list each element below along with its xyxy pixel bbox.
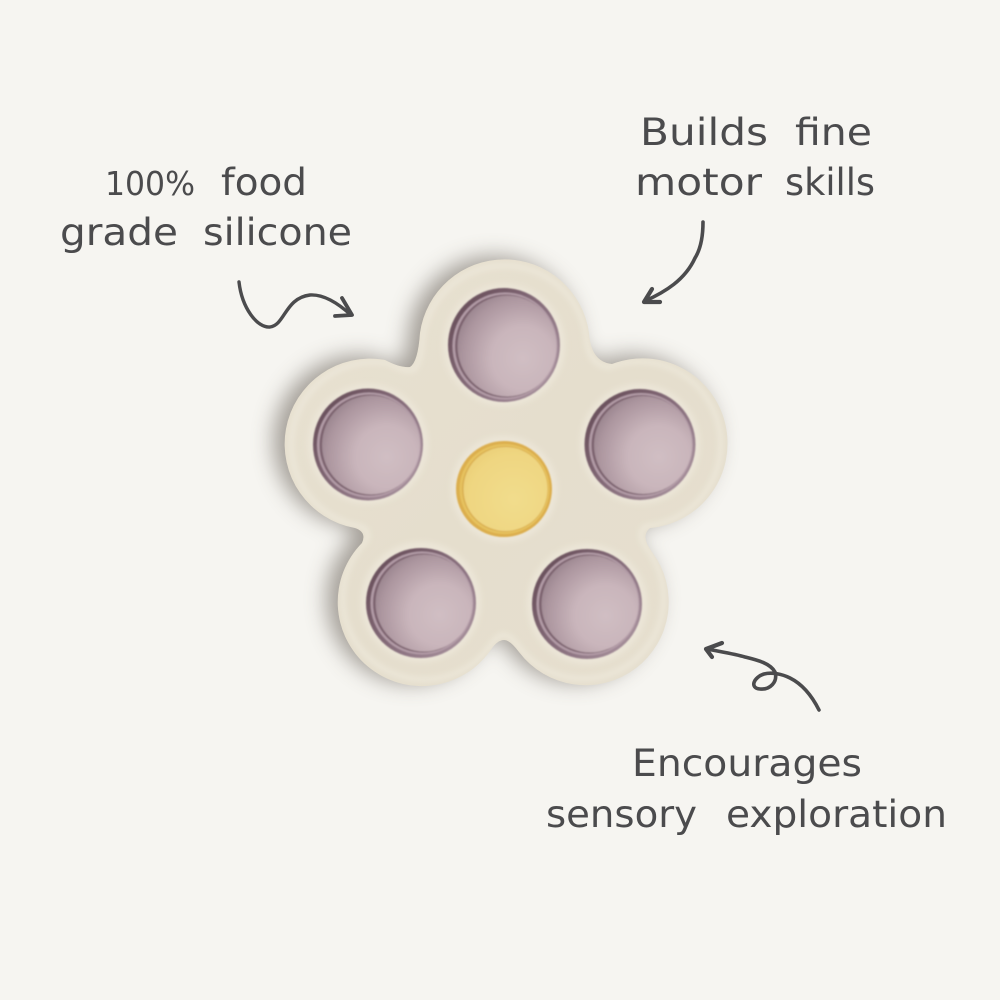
label text: sensory xyxy=(546,793,697,836)
body rim highlight xyxy=(291,266,721,680)
label text: grade xyxy=(60,211,178,254)
label text xyxy=(635,111,875,204)
label text: food xyxy=(221,161,307,204)
label text: fine xyxy=(795,111,872,154)
arrow xyxy=(644,222,703,302)
label text: Encourages xyxy=(632,742,862,785)
label text: skills xyxy=(785,161,875,204)
label text: exploration xyxy=(726,793,947,836)
label text xyxy=(60,161,352,254)
callout: sensory exploration xyxy=(546,643,947,836)
button: lower right petal xyxy=(527,544,647,664)
button: top petal xyxy=(443,284,565,406)
button: yellow center xyxy=(451,436,557,542)
button: lower left petal xyxy=(361,542,481,662)
button: left petal xyxy=(308,384,428,504)
shadow of flower toy xyxy=(274,256,717,683)
arrow xyxy=(706,643,819,710)
label text: 100% xyxy=(105,164,195,203)
label text: Builds xyxy=(640,111,768,154)
label text: motor xyxy=(635,161,763,204)
callout: fine motor skills xyxy=(635,111,875,302)
callout: food grade silicone xyxy=(60,161,352,327)
toy body xyxy=(285,259,728,686)
flower toy xyxy=(285,259,728,686)
button: right petal xyxy=(580,384,700,504)
arrow xyxy=(239,282,352,327)
label text: silicone xyxy=(203,211,352,254)
label text xyxy=(546,742,947,836)
